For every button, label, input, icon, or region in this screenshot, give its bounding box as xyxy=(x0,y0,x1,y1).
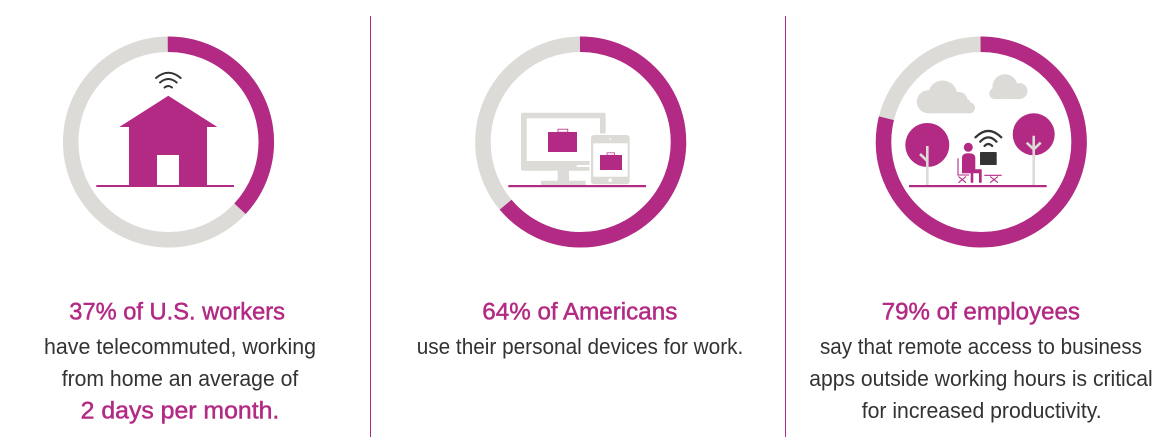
text block: remote access detail: apps outside working hours is critical xyxy=(809,366,1153,391)
text block: remote access detail: for increased productivity. xyxy=(862,398,1102,423)
heading: 79% of employees: 79% of employees xyxy=(882,298,1080,325)
text block: telecommuting detail: 2 days per month. xyxy=(81,397,279,424)
text block: telecommuting detail: from home an average of xyxy=(62,366,299,391)
donut chart: 79% xyxy=(884,44,1079,240)
text block: remote access detail: say that remote access to business xyxy=(820,334,1142,359)
text block: remote access detail xyxy=(809,334,1153,423)
panel: telecommuting xyxy=(44,44,316,424)
donut chart: 37% xyxy=(71,44,266,240)
icon: person working outdoors xyxy=(905,74,1055,187)
icon: house with wifi xyxy=(96,73,234,187)
icon: monitor and tablet with briefcases xyxy=(508,113,646,187)
donut chart: 64% xyxy=(483,44,678,240)
heading: 64% of Americans: 64% of Americans xyxy=(482,298,677,325)
panel: remote access xyxy=(809,44,1153,423)
panel: personal devices xyxy=(417,44,743,359)
heading: 37% of U.S. workers: 37% of U.S. workers xyxy=(69,298,285,325)
text block: personal devices detail: use their personal devices for work. xyxy=(417,334,743,359)
text block: telecommuting detail: have telecommuted, working xyxy=(44,334,316,359)
text block: telecommuting detail xyxy=(44,334,316,424)
